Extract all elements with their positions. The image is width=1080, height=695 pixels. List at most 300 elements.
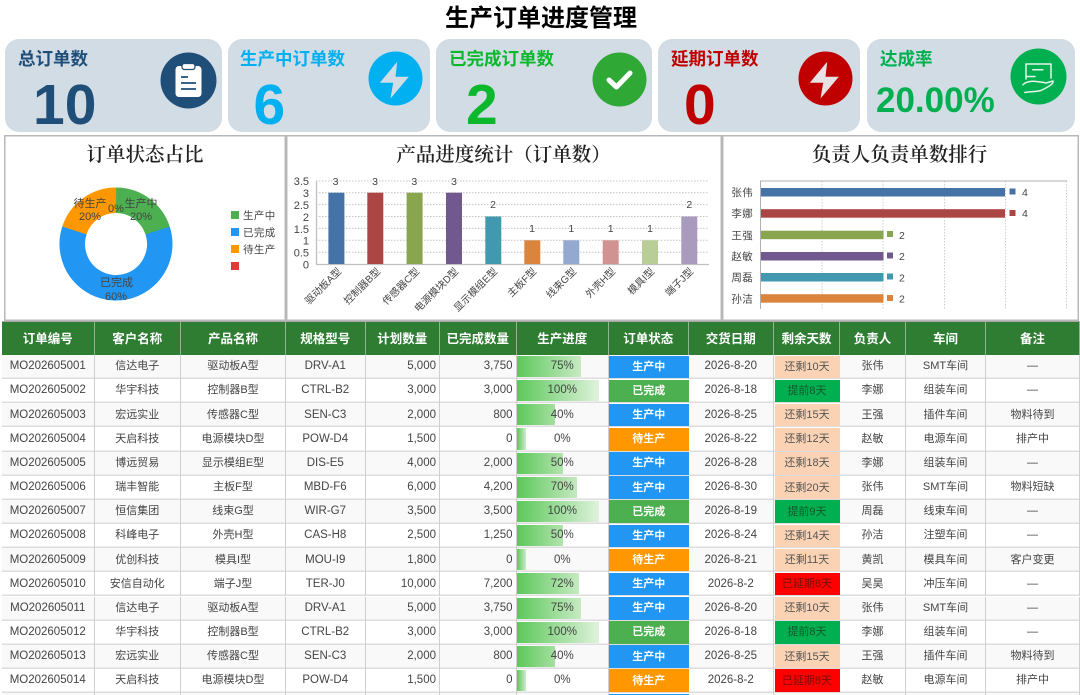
- row MO202605011: 生产中: [632, 602, 665, 614]
- row MO202605013: 还剩15天: [784, 651, 830, 663]
- row MO202605005: —: [1027, 457, 1038, 469]
- row MO202605012: 组装车间: [924, 626, 968, 638]
- row MO202605014: 待生产: [632, 675, 665, 687]
- row MO202605004: MO202605004: [10, 433, 86, 445]
- row MO202605009: 模具车间: [924, 554, 968, 566]
- card label: 总订单数: [18, 46, 88, 71]
- icon: hand holding document: [1010, 48, 1066, 104]
- value markers and labels: 2: [899, 251, 905, 263]
- row MO202605008: 注塑车间: [924, 529, 968, 541]
- row MO202605005: 2,000: [484, 457, 512, 469]
- row MO202605011: 3,750: [484, 602, 512, 614]
- row MO202605013: 插件车间: [924, 650, 968, 662]
- row MO202605001: 驱动板A型: [207, 360, 259, 372]
- panel: product progress statistics: [286, 135, 722, 321]
- row MO202605006: 6,000: [407, 481, 436, 493]
- row MO202605002: 李娜: [862, 384, 884, 396]
- row MO202605004: 1,500: [407, 433, 436, 445]
- donut data labels: 待生产: [74, 196, 106, 210]
- row MO202605011: 信达电子: [115, 602, 159, 614]
- table header: 订单状态: [623, 332, 673, 346]
- row MO202605001: —: [1027, 360, 1038, 372]
- row MO202605012: 控制器B型: [207, 626, 259, 638]
- row MO202605002: 组装车间: [924, 384, 968, 396]
- row MO202605001: 3,750: [484, 360, 512, 372]
- row MO202605014: 1,500: [407, 674, 436, 686]
- bars: [761, 188, 1005, 303]
- row MO202605010: 端子J型: [214, 578, 252, 590]
- row MO202605011: SMT车间: [923, 602, 968, 614]
- data labels: 1: [647, 223, 653, 235]
- row MO202605006: 还剩20天: [784, 482, 830, 494]
- row MO202605007: 100%: [548, 505, 577, 517]
- row MO202605012: [2, 621, 1080, 645]
- row MO202605013: [2, 645, 1080, 669]
- panel: order status share: [4, 135, 286, 321]
- KPI card: total orders: [5, 39, 222, 132]
- row MO202605003: 王强: [862, 409, 884, 421]
- row MO202605006: 主板F型: [213, 481, 253, 493]
- row MO202605007: 2026-8-19: [705, 505, 757, 517]
- table header: 剩余天数: [781, 332, 832, 346]
- person labels: 王强: [731, 230, 753, 242]
- table header: 负责人: [854, 332, 891, 346]
- row MO202605002: 已完成: [632, 385, 665, 397]
- y axis labels: 1.5: [294, 224, 309, 236]
- row MO202605008: [2, 524, 1080, 548]
- category labels: 外壳H型: [583, 265, 618, 300]
- value markers and labels: [887, 187, 1028, 306]
- row MO202605007: MO202605007: [10, 505, 86, 517]
- row MO202605008: —: [1027, 529, 1038, 541]
- row MO202605002: 控制器B型: [207, 384, 259, 396]
- row MO202605005: 生产中: [632, 457, 665, 469]
- donut data labels: 0%: [108, 203, 124, 215]
- row MO202605007: 线束车间: [924, 505, 968, 517]
- row MO202605014: MO202605014: [10, 674, 86, 686]
- row MO202605011: 75%: [551, 602, 574, 614]
- row MO202605007: 已完成: [632, 506, 665, 518]
- row MO202605003: 传感器C型: [207, 409, 259, 421]
- row MO202605001: 生产中: [632, 361, 665, 373]
- data labels: 2: [490, 199, 496, 211]
- row MO202605007: 3,500: [407, 505, 436, 517]
- row MO202605005: 李娜: [862, 457, 884, 469]
- value markers and labels: 4: [1022, 208, 1028, 220]
- row MO202605006: SMT车间: [923, 481, 968, 493]
- row MO202605012: 李娜: [862, 626, 884, 638]
- data labels: 3: [451, 176, 457, 188]
- row MO202605004: 电源模块D型: [202, 433, 264, 445]
- row MO202605008: 还剩14天: [784, 530, 830, 542]
- row MO202605004: 天启科技: [115, 433, 159, 445]
- row MO202605008: 1,250: [484, 529, 512, 541]
- value markers and labels: 2: [899, 272, 905, 284]
- row MO202605003: 800: [493, 409, 512, 421]
- KPI card: achievement rate: [867, 39, 1075, 132]
- row MO202605001: 张伟: [862, 360, 884, 372]
- row MO202605012: 华宇科技: [115, 626, 159, 638]
- row MO202605002: 提前8天: [787, 385, 827, 397]
- row MO202605003: 宏远实业: [115, 409, 159, 421]
- row MO202605005: 博远贸易: [115, 457, 159, 469]
- row MO202605009: 1,800: [407, 554, 436, 566]
- value markers and labels: 2: [899, 294, 905, 306]
- data labels: [333, 176, 692, 235]
- row MO202605001: SMT车间: [923, 360, 968, 372]
- chart title: 订单状态占比: [86, 139, 204, 167]
- row MO202605004: POW-D4: [302, 433, 348, 445]
- table header: 客户名称: [112, 332, 162, 346]
- row MO202605014: 2026-8-2: [708, 674, 754, 686]
- row MO202605010: —: [1027, 578, 1038, 590]
- row MO202605005: 50%: [551, 457, 574, 469]
- row MO202605002: CTRL-B2: [301, 384, 349, 396]
- row MO202605005: 4,000: [407, 457, 436, 469]
- row MO202605014: 已延期8天: [782, 675, 832, 687]
- table header: 生产进度: [537, 332, 587, 346]
- row MO202605003: SEN-C3: [304, 409, 346, 421]
- row MO202605001: MO202605001: [10, 360, 86, 372]
- card label: 已完成订单数: [449, 46, 554, 71]
- row MO202605012: 3,000: [407, 626, 436, 638]
- y axis labels: 2: [303, 212, 309, 224]
- row MO202605006: MBD-F6: [304, 481, 347, 493]
- row MO202605010: 安信自动化: [110, 578, 165, 590]
- row MO202605001: [2, 355, 1080, 379]
- card label: 生产中订单数: [240, 46, 345, 71]
- row MO202605013: 生产中: [632, 651, 665, 663]
- row MO202605006: 70%: [551, 481, 574, 493]
- row MO202605004: 电源车间: [924, 433, 968, 445]
- row MO202605002: [2, 379, 1080, 403]
- KPI card: in production: [228, 39, 430, 132]
- row MO202605002: —: [1027, 384, 1038, 396]
- y axis labels: 3.5: [294, 176, 309, 188]
- row MO202605003: 还剩15天: [784, 409, 830, 421]
- row MO202605004: 0%: [554, 433, 571, 445]
- category labels: 主板F型: [504, 265, 539, 300]
- KPI card: completed: [436, 39, 652, 132]
- card value: 10: [33, 73, 96, 137]
- row MO202605012: 2026-8-18: [705, 626, 757, 638]
- row MO202605008: 2026-8-24: [705, 529, 757, 541]
- category labels: [302, 265, 696, 315]
- row MO202605005: MO202605005: [10, 457, 86, 469]
- row MO202605003: 40%: [551, 409, 574, 421]
- person labels: 李娜: [731, 207, 753, 220]
- row MO202605004: 2026-8-22: [705, 433, 757, 445]
- row MO202605002: 2026-8-18: [705, 384, 757, 396]
- row MO202605001: 5,000: [407, 360, 436, 372]
- row MO202605013: 传感器C型: [207, 650, 259, 662]
- row MO202605005: 显示模组E型: [202, 457, 264, 469]
- row MO202605014: 0: [506, 674, 512, 686]
- row MO202605012: CTRL-B2: [301, 626, 349, 638]
- row MO202605012: —: [1027, 626, 1038, 638]
- row MO202605007: WIR-G7: [304, 505, 346, 517]
- row MO202605009: 0%: [554, 554, 571, 566]
- row MO202605007: —: [1027, 505, 1038, 517]
- y axis labels: 0: [303, 260, 309, 272]
- row MO202605004: 0: [506, 433, 512, 445]
- person labels: 张伟: [731, 186, 753, 199]
- table header: 交货日期: [706, 332, 756, 346]
- row MO202605009: 0: [506, 554, 512, 566]
- row MO202605013: 宏远实业: [115, 650, 159, 662]
- row MO202605012: 100%: [548, 626, 577, 638]
- row MO202605014: 天启科技: [115, 674, 159, 686]
- row MO202605008: 孙洁: [862, 529, 884, 541]
- row MO202605007: 周磊: [862, 505, 884, 517]
- data labels: 3: [333, 176, 339, 188]
- row MO202605009: 优创科技: [115, 554, 159, 566]
- category labels: 模具I型: [625, 265, 657, 297]
- table header: 订单编号: [23, 332, 73, 346]
- row MO202605009: 客户变更: [1010, 554, 1054, 566]
- table header: 备注: [1020, 332, 1045, 346]
- row MO202605013: SEN-C3: [304, 650, 346, 662]
- row MO202605014: 赵敏: [862, 674, 884, 686]
- row MO202605013: 800: [493, 650, 512, 662]
- value markers and labels: 4: [1022, 187, 1028, 199]
- row MO202605009: 待生产: [632, 554, 665, 566]
- row MO202605006: [2, 476, 1080, 500]
- table header: 规格型号: [300, 332, 350, 346]
- person labels: [731, 186, 753, 306]
- table header: 产品名称: [208, 332, 258, 346]
- row MO202605010: 72%: [551, 578, 574, 590]
- row MO202605009: 还剩11天: [785, 554, 829, 566]
- row MO202605011: 5,000: [407, 602, 436, 614]
- row MO202605009: MO202605009: [10, 554, 86, 566]
- bar chart: [294, 176, 709, 315]
- category labels: 驱动板A型: [302, 265, 344, 307]
- row MO202605006: 物料短缺: [1010, 481, 1054, 493]
- row MO202605003: 2026-8-25: [705, 409, 757, 421]
- row MO202605013: 王强: [862, 650, 884, 662]
- row MO202605003: 生产中: [632, 409, 665, 421]
- row MO202605013: 2,000: [407, 650, 436, 662]
- row MO202605001: 2026-8-20: [705, 360, 757, 372]
- person labels: 周磊: [731, 272, 753, 284]
- icon: lightning: [368, 52, 422, 106]
- card value: 0: [684, 73, 716, 137]
- value markers and labels: 2: [899, 230, 905, 242]
- row MO202605011: [2, 596, 1080, 621]
- row MO202605013: MO202605013: [10, 650, 86, 662]
- donut ring: [61, 189, 171, 299]
- row MO202605005: 2026-8-28: [705, 457, 757, 469]
- row MO202605002: MO202605002: [10, 384, 86, 396]
- row MO202605002: 3,000: [484, 384, 512, 396]
- row MO202605003: 物料待到: [1010, 409, 1054, 421]
- row MO202605004: 赵敏: [862, 433, 884, 445]
- row MO202605010: 10,000: [401, 578, 436, 590]
- row MO202605004: 还剩12天: [784, 433, 830, 445]
- row MO202605007: [2, 500, 1080, 524]
- donut data labels: 已完成: [100, 275, 133, 289]
- category labels: 电源模块D型: [411, 265, 461, 315]
- row MO202605009: MOU-I9: [305, 554, 345, 566]
- row MO202605010: TER-J0: [306, 578, 345, 590]
- row MO202605011: —: [1027, 602, 1038, 614]
- row MO202605002: 100%: [548, 384, 577, 396]
- row MO202605014: 排产中: [1016, 674, 1049, 686]
- row MO202605004: 排产中: [1016, 433, 1049, 445]
- legend: 已完成: [243, 226, 276, 239]
- row MO202605010: 生产中: [632, 578, 665, 590]
- row MO202605010: 7,200: [484, 578, 512, 590]
- table header: [2, 322, 1080, 355]
- card value: 6: [254, 73, 285, 137]
- horizontal bar chart: [731, 180, 1067, 309]
- row MO202605003: 2,000: [407, 409, 436, 421]
- row MO202605009: 2026-8-21: [705, 554, 757, 566]
- data labels: 1: [608, 223, 614, 235]
- category labels: 传感器C型: [380, 265, 422, 308]
- data labels: 3: [411, 176, 417, 188]
- row MO202605008: CAS-H8: [304, 529, 346, 541]
- donut chart: [59, 188, 276, 303]
- y axis labels: 2.5: [294, 200, 309, 212]
- table header: 已完成数量: [446, 332, 509, 346]
- row MO202605011: 还剩10天: [784, 602, 830, 614]
- row MO202605004: [2, 427, 1080, 452]
- data labels: 3: [372, 176, 378, 188]
- order table: [2, 321, 1080, 695]
- y axis labels: [294, 176, 309, 272]
- category labels: 线束G型: [543, 265, 579, 301]
- next row sliver: [2, 693, 1080, 695]
- row MO202605013: 物料待到: [1010, 650, 1054, 662]
- legend: 待生产: [243, 243, 276, 256]
- row MO202605006: 瑞丰智能: [115, 481, 159, 493]
- row MO202605010: 冲压车间: [924, 578, 968, 590]
- row MO202605001: DRV-A1: [305, 360, 346, 372]
- donut data labels: 生产中: [124, 196, 158, 210]
- row MO202605013: 40%: [551, 650, 574, 662]
- row MO202605007: 3,500: [484, 505, 512, 517]
- category labels: 显示模组E型: [451, 265, 500, 314]
- row MO202605002: 3,000: [407, 384, 436, 396]
- row MO202605014: [2, 669, 1080, 693]
- row MO202605008: 生产中: [632, 530, 665, 542]
- data labels: 2: [686, 199, 692, 211]
- row MO202605008: 外壳H型: [213, 529, 253, 541]
- row MO202605005: [2, 452, 1080, 476]
- card value: 2: [466, 73, 498, 137]
- row MO202605006: 4,200: [484, 481, 512, 493]
- row MO202605012: 3,000: [484, 626, 512, 638]
- row MO202605012: 已完成: [632, 626, 665, 638]
- legend: [231, 209, 276, 270]
- KPI card: delayed: [658, 39, 860, 132]
- row MO202605008: 科峰电子: [115, 529, 159, 541]
- row MO202605005: 还剩18天: [784, 457, 830, 469]
- row MO202605014: 电源车间: [924, 674, 968, 686]
- row MO202605008: 50%: [551, 529, 574, 541]
- chart title: 负责人负责单数排行: [812, 139, 987, 167]
- row MO202605011: 张伟: [862, 602, 884, 614]
- row MO202605009: 模具I型: [215, 554, 251, 566]
- donut data labels: 60%: [105, 291, 127, 303]
- row MO202605001: 信达电子: [115, 360, 159, 372]
- y axis labels: 3: [303, 188, 309, 200]
- row MO202605006: 张伟: [862, 481, 884, 493]
- row MO202605011: MO202605011: [10, 602, 85, 614]
- row MO202605013: 2026-8-25: [705, 650, 757, 662]
- row MO202605007: 线束G型: [212, 505, 254, 517]
- row MO202605001: 75%: [551, 360, 574, 372]
- row MO202605014: 电源模块D型: [202, 674, 264, 686]
- row MO202605004: 待生产: [632, 433, 665, 445]
- row MO202605007: 恒信集团: [115, 505, 159, 517]
- row MO202605011: 驱动板A型: [207, 602, 259, 614]
- table header: 车间: [933, 332, 958, 346]
- row MO202605009: [2, 548, 1080, 572]
- person labels: 孙洁: [731, 292, 753, 306]
- card value: 20.00%: [876, 80, 995, 120]
- row MO202605010: MO202605010: [10, 578, 86, 590]
- y axis labels: 0.5: [294, 248, 309, 260]
- category labels: 端子J型: [662, 265, 696, 299]
- row MO202605009: 黄凯: [862, 554, 884, 566]
- icon: check mark: [592, 52, 646, 106]
- row MO202605011: DRV-A1: [305, 602, 346, 614]
- row MO202605008: 2,500: [407, 529, 436, 541]
- row MO202605010: 已延期8天: [782, 578, 832, 590]
- row MO202605011: 2026-8-20: [705, 602, 757, 614]
- row MO202605010: 2026-8-2: [708, 578, 754, 590]
- row MO202605006: 生产中: [632, 482, 665, 494]
- icon: red lightning: [798, 52, 852, 106]
- row MO202605014: 0%: [554, 674, 571, 686]
- row MO202605005: DIS-E5: [307, 457, 344, 469]
- panel: owner ranking: [722, 135, 1079, 321]
- row MO202605010: [2, 572, 1080, 596]
- donut data labels: 20%: [79, 211, 101, 223]
- card label: 延期订单数: [671, 46, 758, 71]
- row MO202605005: 组装车间: [924, 457, 968, 469]
- row MO202605006: 2026-8-30: [705, 481, 757, 493]
- category labels: 控制器B型: [341, 265, 383, 307]
- row MO202605003: MO202605003: [10, 409, 86, 421]
- row MO202605008: MO202605008: [10, 529, 86, 541]
- legend: 生产中: [243, 209, 276, 222]
- row MO202605003: 插件车间: [924, 409, 968, 421]
- table header: 计划数量: [377, 332, 427, 346]
- row MO202605002: 华宇科技: [115, 384, 159, 396]
- person labels: 赵敏: [731, 250, 753, 263]
- row MO202605010: 吴昊: [862, 578, 884, 590]
- data labels: 1: [529, 223, 535, 235]
- donut data labels: 20%: [130, 211, 152, 223]
- data labels: 1: [568, 223, 574, 235]
- row MO202605001: 还剩10天: [784, 361, 830, 373]
- row MO202605012: MO202605012: [10, 626, 86, 638]
- bars: [328, 193, 697, 264]
- icon: clipboard: [160, 52, 216, 108]
- row MO202605007: 提前9天: [787, 506, 827, 518]
- row MO202605006: MO202605006: [10, 481, 86, 493]
- donut data labels: [74, 196, 158, 303]
- y axis labels: 1: [303, 236, 309, 248]
- card label: 达成率: [880, 46, 932, 71]
- row MO202605003: [2, 403, 1080, 427]
- row MO202605012: 提前8天: [787, 626, 827, 638]
- row MO202605014: POW-D4: [302, 674, 348, 686]
